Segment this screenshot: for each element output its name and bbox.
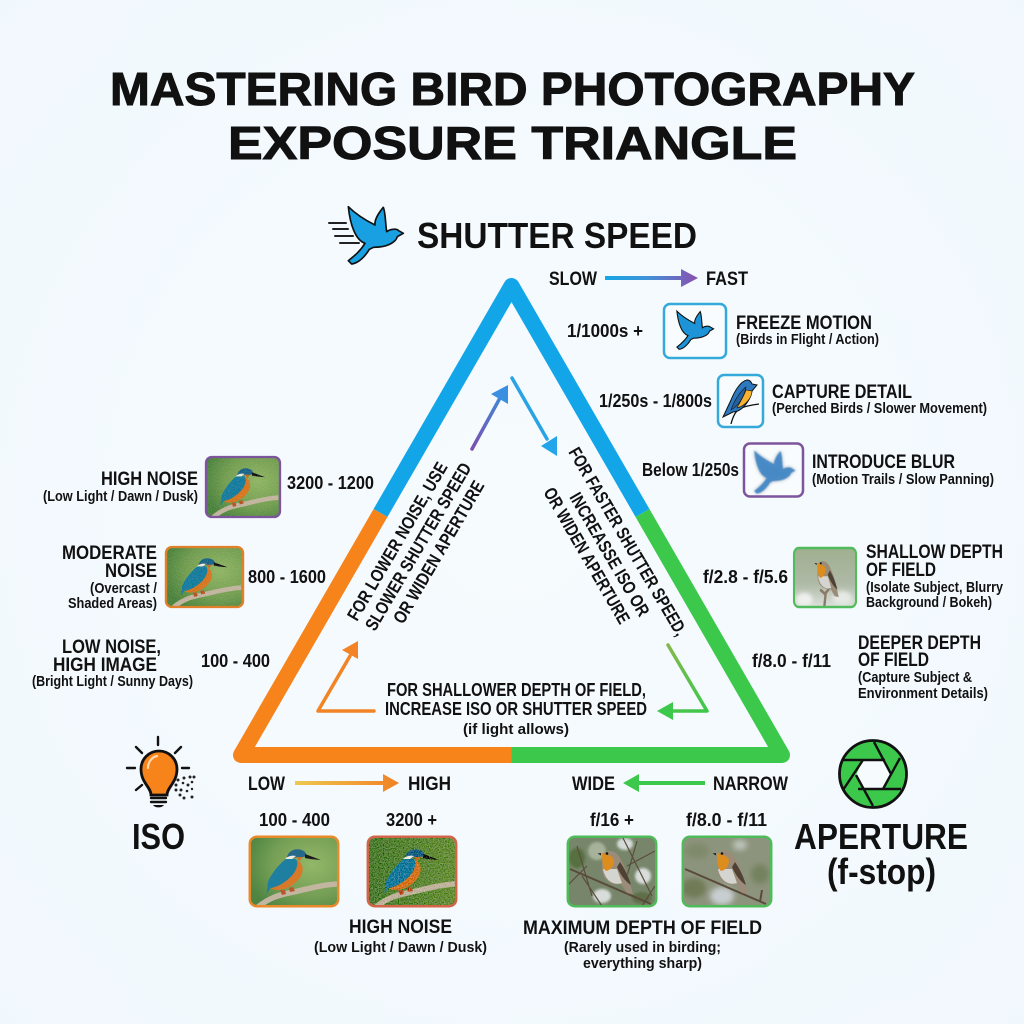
left row: moderate noise: Shaded Areas) [68,595,157,612]
shutter speed scale: slow to fast: SLOW [549,268,597,290]
heading: shutter speed [329,207,697,264]
left row: moderate noise: NOISE [105,560,157,582]
inner note: shallower depth of field [385,680,647,738]
inner note: faster shutter speed: FOR FASTER SHUTTER SPEED, [565,444,691,639]
shutter speed scale: slow to fast [549,268,748,290]
row: freeze motion: FREEZE MOTION [736,312,872,334]
title: EXPOSURE TRIANGLE [228,117,797,169]
right row: shallow depth of field [703,541,1004,611]
iso scale: low to high: HIGH [408,773,451,795]
left row: low noise: HIGH IMAGE [53,654,157,676]
left row: moderate noise: (Overcast / [90,580,158,597]
arrow: iso side up [318,641,374,711]
inner note: faster shutter speed: INCREASSE ISO OR [566,489,653,620]
icon: flying bird with speed lines [329,207,403,264]
row: capture detail: 1/250s - 1/800s [599,391,712,411]
aperture scale: narrow to wide [572,773,788,795]
inner note: shallower depth of field: (if light allows) [463,721,569,738]
exposure triangle frame [241,286,782,755]
row: introduce blur: INTRODUCE BLUR [812,451,955,473]
left row: low noise: LOW NOISE, [62,636,161,658]
aperture examples [523,810,772,972]
row: capture detail: CAPTURE DETAIL [772,381,912,403]
right row: deeper depth of field: f/8.0 - f/11 [752,651,831,671]
arrow: up toward shutter speed [472,385,508,449]
left row: low noise: 100 - 400 [201,651,270,671]
title [110,63,915,169]
aperture label: APERTURE [794,816,968,857]
icon: aperture blades [840,740,906,808]
photo: noisy kingfisher [206,457,280,517]
arrow: down from shutter speed [512,378,557,456]
right row: deeper depth of field: OF FIELD [858,649,929,671]
row: capture detail [599,375,987,427]
arrow: narrow to wide [623,774,705,792]
icon: frozen bird [664,304,726,358]
photo: robin sharp background [567,836,657,907]
right row: deeper depth of field [752,632,988,702]
aperture examples: (Rarely used in birding; [564,939,721,956]
photo: clean kingfisher [249,836,339,907]
shutter speed label: SHUTTER SPEED [417,215,697,256]
inner note: shallower depth of field: FOR SHALLOWER DEPTH OF FIELD, [387,680,646,700]
iso examples [249,810,487,956]
icon: blurred bird [744,444,803,496]
row: freeze motion [567,304,879,358]
aperture section [794,740,968,892]
icon: light bulb with noise [127,737,196,807]
icon: perched bird [718,375,763,427]
row: introduce blur: Below 1/250s [642,460,739,480]
iso examples: HIGH NOISE [349,916,452,938]
left row: moderate noise: 800 - 1600 [248,567,326,587]
inner note: faster shutter speed [540,444,691,639]
inner note: lower noise: FOR LOWER NOISE, USE [343,459,452,624]
right row: shallow depth of field: Background / Bokeh) [866,594,992,611]
iso examples: (Low Light / Dawn / Dusk) [314,939,487,956]
arrow: low to high [295,774,399,792]
iso section [127,737,196,857]
row: capture detail: (Perched Birds / Slower Movement) [772,400,987,417]
left row: high noise: HIGH NOISE [101,468,198,490]
inner note: faster shutter speed: OR WIDEN APERTURE [540,484,634,627]
photo: moderately noisy kingfisher [166,547,243,607]
iso scale: low to high: LOW [248,773,285,795]
iso scale: low to high [248,773,451,795]
shutter speed scale: slow to fast: FAST [706,268,748,290]
left row: moderate noise: MODERATE [62,542,157,564]
aperture scale: narrow to wide: NARROW [713,773,788,795]
left row: low noise: (Bright Light / Sunny Days) [32,673,193,690]
inner note: lower noise: OR WIDEN APERTURE [389,477,488,627]
right row: deeper depth of field: DEEPER DEPTH [858,632,981,654]
right row: shallow depth of field: f/2.8 - f/5.6 [703,567,788,587]
iso examples: 100 - 400 [259,810,330,830]
left row: high noise: 3200 - 1200 [287,473,374,493]
right row: deeper depth of field: Environment Details) [858,685,988,702]
left row: high noise [43,457,374,517]
title: MASTERING BIRD PHOTOGRAPHY [110,63,915,115]
inner note: lower noise: SLOWER SHUTTER SPEED [361,459,475,634]
row: freeze motion: (Birds in Flight / Action) [736,331,879,348]
aperture examples: MAXIMUM DEPTH OF FIELD [523,917,762,939]
inner note: shallower depth of field: INCREASE ISO OR SHUTTER SPEED [385,699,647,719]
photo: robin soft background [682,836,772,907]
left row: moderate noise [62,542,326,612]
photo: high iso kingfisher [367,836,457,907]
aperture examples: f/16 + [590,810,634,830]
row: freeze motion: 1/1000s + [567,321,643,341]
left row: high noise: (Low Light / Dawn / Dusk) [43,488,198,505]
arrow: slow to fast [605,269,698,287]
iso examples: 3200 + [386,810,437,830]
photo: robin with bokeh [794,548,856,607]
aperture examples: everything sharp) [583,955,702,972]
aperture section: (f-stop) [827,851,936,892]
right row: deeper depth of field: (Capture Subject & [858,669,972,686]
row: introduce blur [642,444,994,496]
left row: low noise [32,636,270,690]
aperture scale: narrow to wide: WIDE [572,773,615,795]
aperture examples: f/8.0 - f/11 [686,810,767,830]
right row: shallow depth of field: OF FIELD [866,559,936,581]
iso label: ISO [132,816,185,857]
row: introduce blur: (Motion Trails / Slow Panning) [812,471,994,488]
arrow: aperture side to iso side [657,645,707,720]
